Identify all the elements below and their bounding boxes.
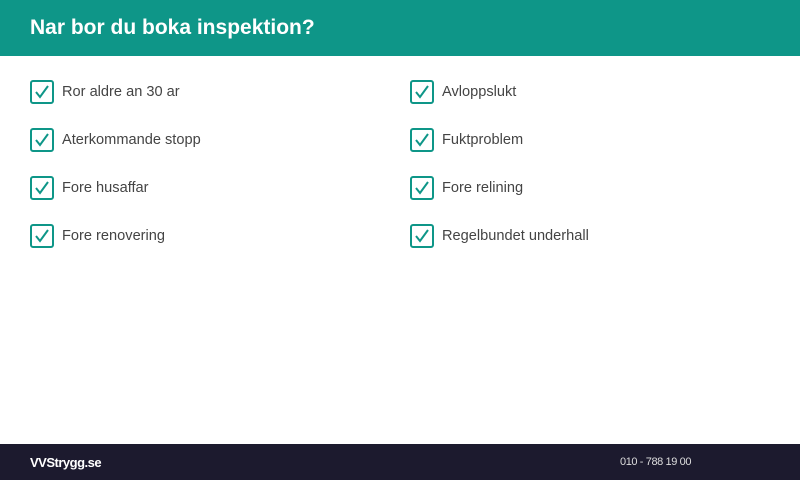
item: Ror aldre an 30 ar — [30, 80, 180, 104]
item: Aterkommande stopp — [30, 128, 201, 152]
item: Fore renovering — [30, 224, 165, 248]
item: Fuktproblem: Fuktproblem — [442, 132, 523, 148]
item: Aterkommande stopp: Aterkommande stopp — [62, 132, 201, 148]
item: Fore relining: Fore relining — [442, 180, 523, 196]
header bar — [0, 0, 800, 56]
item: Fore relining — [410, 176, 523, 200]
footer — [0, 444, 800, 480]
title: Nar bor du boka inspektion? — [30, 16, 315, 39]
item: Regelbundet underhall: Regelbundet underhall — [442, 228, 589, 244]
item: Fuktproblem — [410, 128, 523, 152]
item: Fore husaffar — [30, 176, 149, 200]
footer brand: VVStrygg.se — [30, 455, 101, 470]
footer phone: 010 - 788 19 00 — [620, 456, 691, 468]
item: Avloppslukt: Avloppslukt — [442, 84, 516, 100]
item: Regelbundet underhall — [410, 224, 589, 248]
item: Fore husaffar: Fore husaffar — [62, 180, 149, 196]
item: Avloppslukt — [410, 80, 516, 104]
item: Fore renovering: Fore renovering — [62, 228, 165, 244]
item: Ror aldre an 30 ar: Ror aldre an 30 ar — [62, 84, 180, 100]
